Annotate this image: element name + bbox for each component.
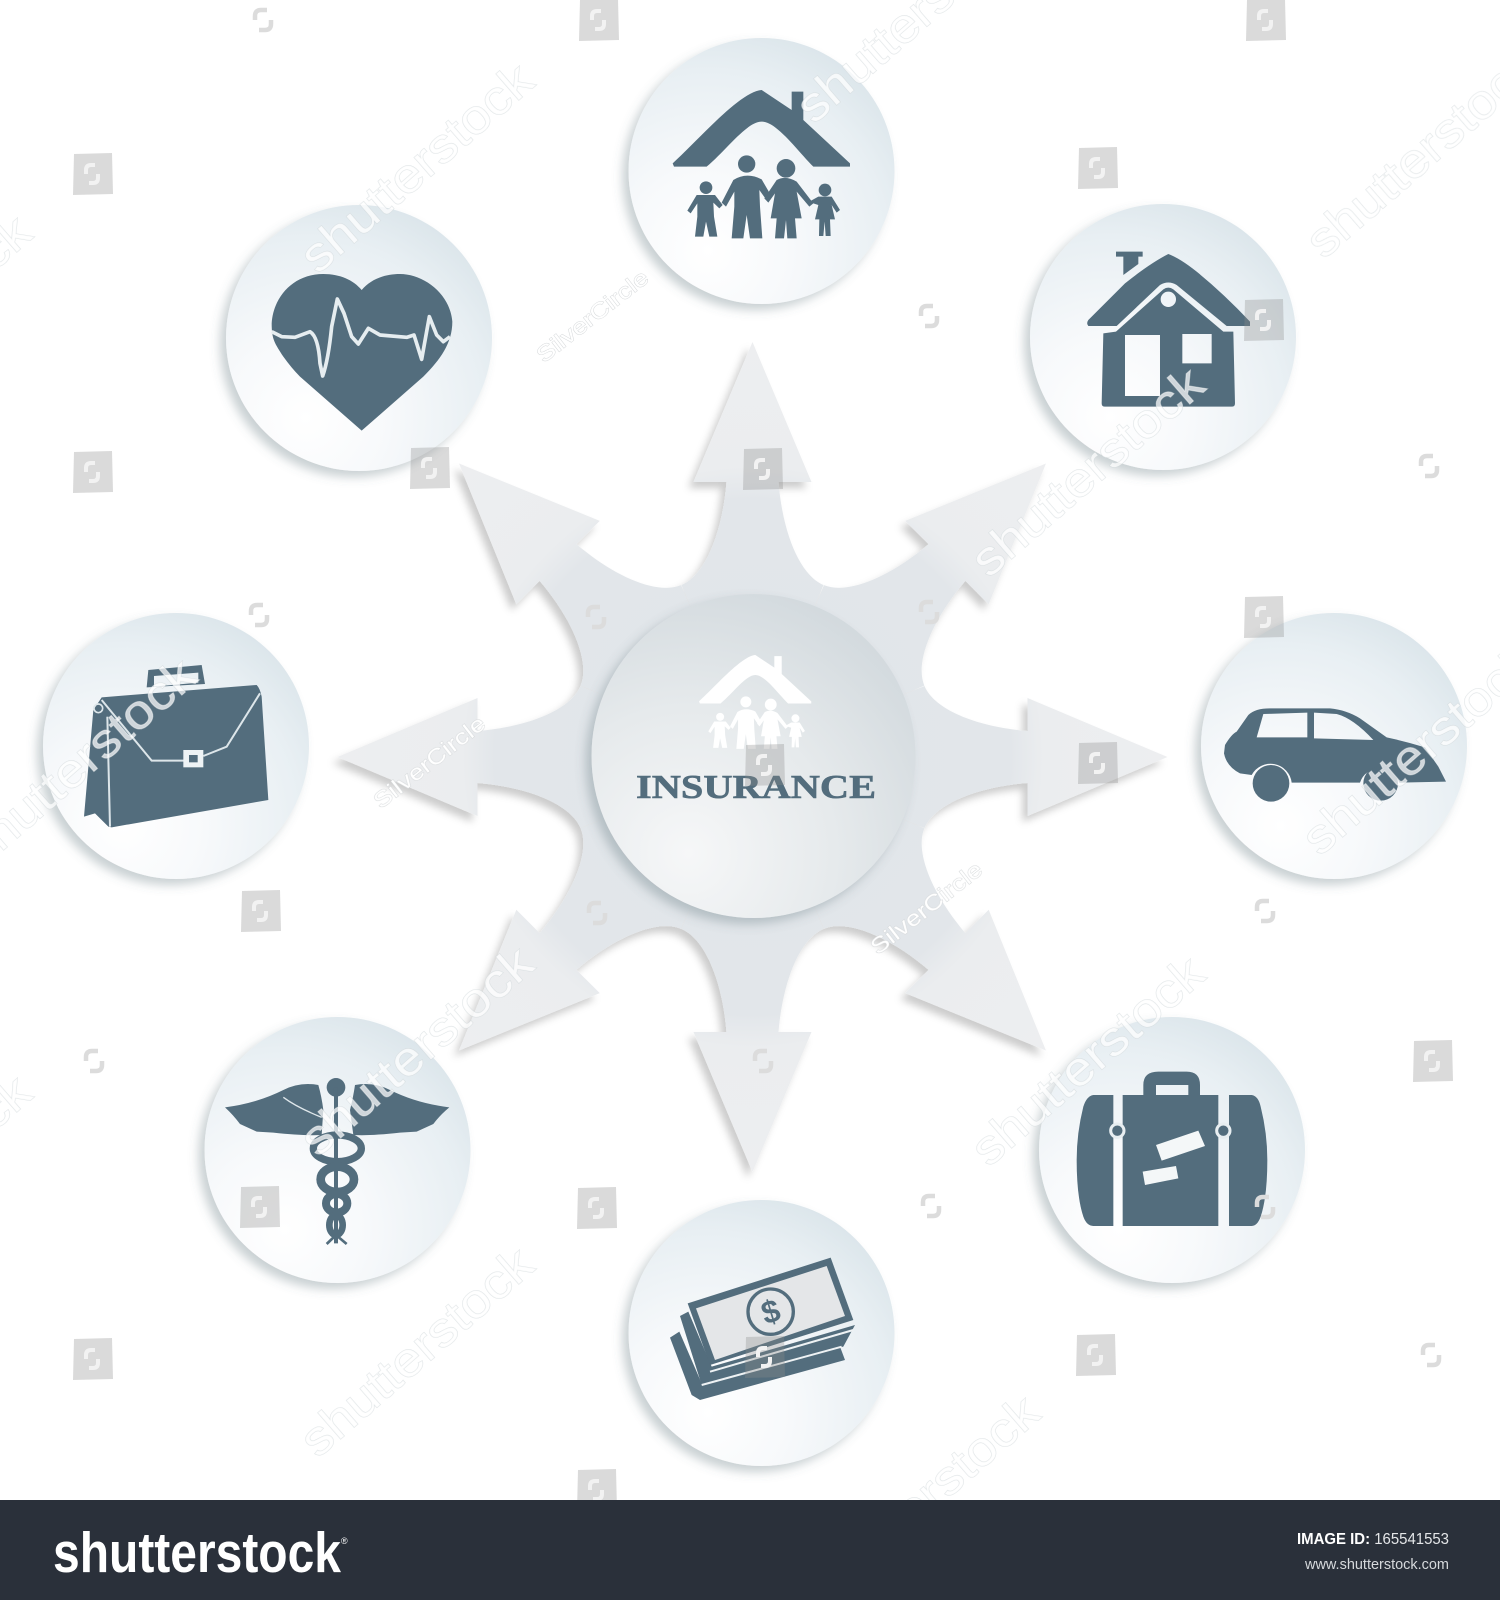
icon: house (1087, 252, 1250, 407)
registered mark: ® (341, 1536, 348, 1546)
panel: money (628, 1200, 894, 1466)
watermark: SilverCircle credits (368, 265, 987, 959)
disc (1030, 204, 1296, 470)
footer background (0, 1500, 1500, 1600)
arrow: left (338, 686, 752, 828)
disc (226, 205, 492, 471)
arrow: up-right (702, 413, 1096, 807)
footer logo: shutterstock: shutterstock (53, 1521, 341, 1585)
disc (43, 613, 309, 879)
website: www.shutterstock.com (1304, 1556, 1449, 1573)
panel: car (1201, 613, 1467, 879)
disc (628, 1200, 894, 1466)
eight-arrow star (338, 342, 1168, 1172)
icon: caduceus (225, 1078, 449, 1244)
arrow: down-right (702, 707, 1096, 1101)
panel: family protection (628, 38, 894, 304)
disc (204, 1017, 470, 1283)
panel: home (1030, 204, 1296, 470)
panel: business (43, 613, 309, 879)
icon: heart with pulse (272, 274, 452, 431)
arrow: down (682, 757, 824, 1172)
watermark: SilverCircle credits: SilverCircle (368, 711, 490, 813)
icon: briefcase (84, 665, 268, 827)
hub disc (592, 594, 916, 918)
disc (628, 38, 894, 304)
icon: banknote stack: $ (757, 1292, 785, 1331)
watermark: SilverCircle credits: SilverCircle (865, 857, 987, 959)
panel: travel (1039, 1017, 1305, 1283)
title: INSURANCE: INSURANCE (636, 769, 876, 806)
arrow: up (682, 342, 824, 757)
watermark text: shutterstock (961, 945, 1215, 1176)
icon: white family under roof (699, 655, 811, 749)
icon: car (1224, 708, 1446, 802)
arrow: up-left (409, 413, 803, 807)
watermark text: shutterstock (290, 1236, 544, 1467)
panel: central insurance hub (592, 594, 916, 918)
watermark: SilverCircle credits: SilverCircle (531, 265, 653, 367)
icon: family under roof (673, 90, 850, 238)
image id: IMAGE ID: 165541553 (1297, 1531, 1449, 1548)
watermark text: shutterstock (961, 356, 1215, 587)
disc (1039, 1017, 1305, 1283)
footer bar (0, 1500, 1500, 1600)
panel: health (226, 205, 492, 471)
icon: suitcase (1077, 1072, 1267, 1226)
disc (1201, 613, 1467, 879)
watermark text: shutterstock (290, 52, 544, 283)
watermark text: shutterstock (290, 935, 544, 1166)
panel: medical (204, 1017, 470, 1283)
arrow: right (752, 686, 1168, 828)
arrow: down-left (409, 707, 803, 1101)
icon: banknote stack (670, 1258, 855, 1400)
